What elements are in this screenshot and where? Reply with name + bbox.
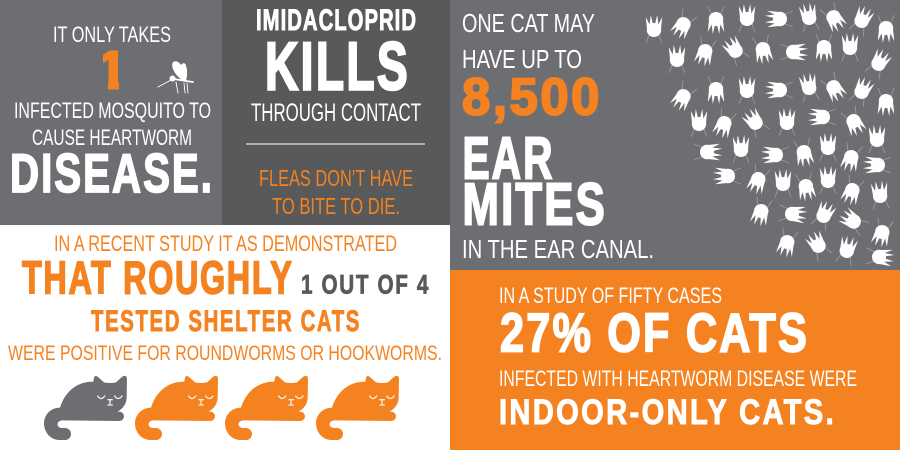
heading: ear mites bbox=[462, 126, 607, 238]
text: through contact: THROUGH CONTACT bbox=[251, 99, 421, 127]
icon: orange cat three bbox=[316, 376, 399, 440]
panel: indoor cats fact bbox=[450, 270, 900, 450]
text: infected mosquito to: INFECTED MOSQUITO TO bbox=[14, 98, 211, 123]
statistic: 1 out of 4: 1 OUT OF 4 bbox=[301, 270, 430, 300]
text: it only takes: IT ONLY TAKES bbox=[53, 22, 171, 47]
icon row: four cats bbox=[44, 376, 399, 440]
text: fleas don't have to bite to die: TO BITE TO DIE. bbox=[272, 193, 400, 219]
text: one cat may have up to: ONE CAT MAY bbox=[462, 8, 595, 38]
heading: ear mites: MITES bbox=[462, 172, 607, 238]
heading: indoor-only cats: INDOOR-ONLY CATS. bbox=[499, 393, 836, 432]
text: in a study of fifty cases: IN A STUDY OF FIFTY CASES bbox=[499, 283, 722, 308]
panel: mosquito fact bbox=[0, 0, 222, 225]
text: cause heartworm: CAUSE HEARTWORM bbox=[32, 125, 192, 150]
text: in a recent study: IN A RECENT STUDY IT AS DEMONSTRATED bbox=[54, 231, 397, 256]
heading: kills: KILLS bbox=[265, 28, 410, 104]
text: fleas don't have to bite to die bbox=[259, 165, 413, 219]
heading: tested shelter cats: TESTED SHELTER CATS bbox=[91, 305, 361, 338]
panel: shelter cats study bbox=[0, 225, 450, 450]
panel: imidacloprid fact bbox=[222, 0, 450, 225]
number: 1: 1 bbox=[97, 40, 127, 100]
text: one cat may have up to: HAVE UP TO bbox=[462, 44, 582, 74]
number: 8,500: 8,500 bbox=[462, 68, 602, 126]
icon: mosquito bbox=[158, 61, 193, 93]
heading: 27% of cats: 27% OF CATS bbox=[500, 302, 809, 364]
icon: orange cat one bbox=[135, 376, 218, 440]
heading: imidacloprid: IMIDACLOPRID bbox=[256, 4, 417, 37]
heading: disease: DISEASE. bbox=[10, 142, 214, 204]
icon group: ear mites bbox=[646, 2, 895, 266]
icon: gray cat bbox=[44, 376, 127, 440]
panel: ear mites fact bbox=[450, 0, 900, 270]
heading: ear mites: EAR bbox=[462, 126, 554, 192]
text: positive for roundworms or hookworms: WERE POSITIVE FOR ROUNDWORMS OR HOOKWORMS. bbox=[8, 342, 442, 365]
text: fleas don't have to bite to die: FLEAS DON’T HAVE bbox=[259, 165, 413, 191]
icon: orange cat two bbox=[225, 376, 308, 440]
text: one cat may have up to bbox=[462, 8, 595, 74]
heading: that roughly: THAT ROUGHLY bbox=[22, 252, 294, 304]
text: in the ear canal: IN THE EAR CANAL. bbox=[462, 234, 654, 264]
